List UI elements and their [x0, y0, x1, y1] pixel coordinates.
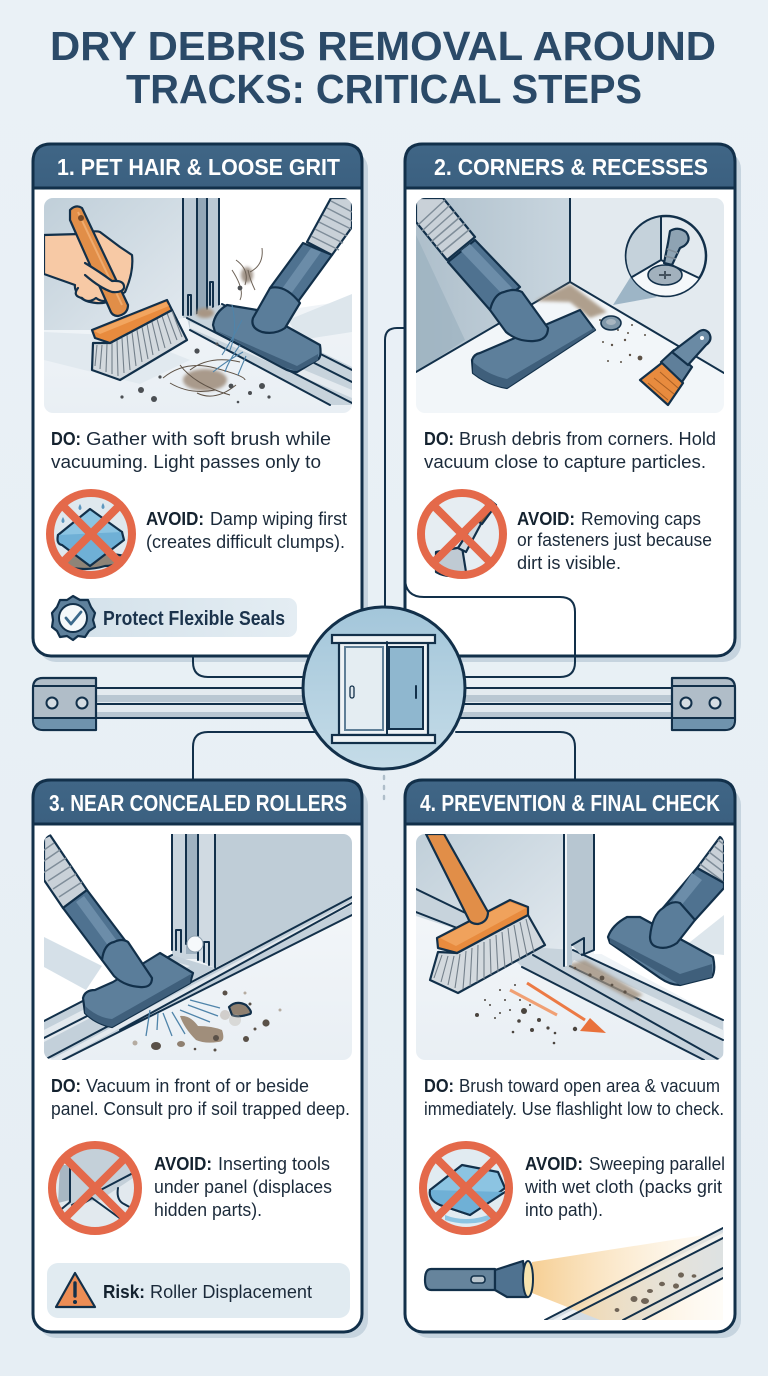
- text: avoid: AVOID:: [146, 508, 204, 529]
- connector: card 2 to hub: [385, 328, 405, 607]
- title: DRY DEBRIS REMOVAL AROUND: [50, 23, 716, 69]
- heading: step 3: [33, 780, 362, 824]
- illustration: vacuuming beside the panel: [34, 834, 352, 1060]
- text: avoid: Removing caps: [581, 508, 701, 529]
- callout: protect flexible seals: [52, 596, 297, 640]
- heading: step 1: [33, 144, 362, 188]
- text: avoid: Inserting tools: [218, 1153, 330, 1174]
- heading: step 1: 1. PET HAIR & LOOSE GRIT: [57, 154, 340, 180]
- text: avoid: or fasteners just because: [517, 529, 712, 550]
- text: do: DO:: [51, 1075, 81, 1096]
- vacuum: [606, 836, 724, 986]
- text: avoid: [524, 1153, 725, 1220]
- track: [187, 304, 352, 405]
- callout: protect flexible seals: Protect Flexible Seals: [103, 608, 285, 630]
- text: do: vacuuming. Light passes only to: [51, 451, 321, 472]
- icon: no tools under panel: [52, 1145, 138, 1231]
- icon: no damp cloth: [50, 493, 132, 575]
- connector: card 3 to hub: [193, 732, 317, 780]
- text: avoid: with wet cloth (packs grit: [524, 1176, 722, 1197]
- text: do: DO:: [424, 428, 454, 449]
- text: avoid: dirt is visible.: [517, 552, 621, 573]
- text: do: panel. Consult pro if soil trapped deep.: [51, 1098, 350, 1119]
- text: avoid: under panel (displaces: [154, 1176, 332, 1197]
- text: do: vacuum close to capture particles.: [424, 451, 706, 472]
- grit and arrow: [475, 983, 606, 1044]
- text: do: DO:: [424, 1075, 454, 1096]
- text: avoid: [146, 508, 347, 552]
- hub: sliding door icon: [303, 607, 465, 769]
- inset: fastener: [613, 216, 706, 305]
- panel: 3. near concealed rollers: [33, 780, 368, 1338]
- heading: step 2: [405, 144, 735, 188]
- text: do: [424, 1075, 724, 1119]
- connector: inner loop to hub: [405, 578, 575, 677]
- illustration: vacuum in corner with fastener inset: [416, 198, 724, 413]
- callout: risk roller displacement: [47, 1263, 350, 1318]
- connector: card 1 to hub: [193, 656, 305, 677]
- brush: [426, 834, 545, 993]
- text: do: [424, 428, 716, 472]
- door edge: [564, 834, 594, 966]
- icon: check badge: [52, 596, 95, 640]
- heading: step 4: [405, 780, 735, 824]
- text: avoid: Sweeping parallel: [589, 1153, 725, 1174]
- track: [44, 897, 352, 1060]
- text: avoid: AVOID:: [517, 508, 575, 529]
- hand and brush: [44, 206, 187, 380]
- icon: warning triangle: [56, 1273, 95, 1307]
- icon: no wet cloth: [423, 1145, 509, 1231]
- vacuum: [34, 835, 193, 1027]
- small paint brush: [640, 330, 710, 405]
- text: avoid: [517, 508, 712, 573]
- dirt and air streaks: [132, 990, 282, 1052]
- text: avoid: [154, 1153, 332, 1220]
- text: avoid: AVOID:: [525, 1153, 583, 1174]
- track: [416, 889, 723, 1062]
- text: do: Vacuum in front of or beside: [86, 1075, 309, 1096]
- text: do: Brush toward open area & vacuum: [459, 1075, 720, 1096]
- text: avoid: Damp wiping first: [210, 508, 347, 529]
- track rail with end brackets: [33, 678, 735, 730]
- text: do: Brush debris from corners. Hold: [459, 428, 716, 449]
- text: do: DO:: [51, 428, 81, 449]
- title: [50, 23, 716, 112]
- text: do: [51, 1075, 350, 1119]
- connector: card 4 to hub: [456, 732, 575, 780]
- heading: step 3: 3. NEAR CONCEALED ROLLERS: [49, 790, 347, 816]
- text: avoid: into path).: [525, 1199, 603, 1220]
- text: do: Gather with soft brush while: [86, 428, 331, 449]
- title: TRACKS: CRITICAL STEPS: [126, 66, 642, 112]
- icon: no removing fasteners: [421, 493, 503, 576]
- vacuum: [213, 198, 352, 372]
- vacuum: [416, 198, 595, 388]
- panel: 4. prevention and final check: [405, 780, 743, 1338]
- text: avoid: (creates difficult clumps).: [146, 531, 345, 552]
- text: avoid: AVOID:: [154, 1153, 212, 1174]
- pet hair and grit: [120, 248, 271, 403]
- text: do: immediately. Use flashlight low to check.: [424, 1098, 724, 1119]
- callout: risk roller displacement: Risk:: [103, 1281, 145, 1302]
- flashlight: [425, 1261, 533, 1297]
- callout: risk roller displacement: Roller Displacement: [150, 1281, 312, 1302]
- illustration: flashlight inspecting track: [425, 1228, 723, 1320]
- text: do: [51, 428, 331, 472]
- illustration: brush toward open area: [416, 834, 743, 1062]
- bracket: right: [672, 678, 735, 730]
- panel: 2. corners and recesses: [405, 144, 741, 677]
- illustration: brush and vacuum gathering hair: [44, 198, 352, 413]
- heading: step 2: 2. CORNERS & RECESSES: [434, 154, 708, 180]
- panel: 1. pet hair and loose grit: [33, 144, 368, 662]
- dotted divider: [383, 776, 385, 806]
- text: avoid: hidden parts).: [154, 1199, 262, 1220]
- bracket: left: [33, 678, 96, 730]
